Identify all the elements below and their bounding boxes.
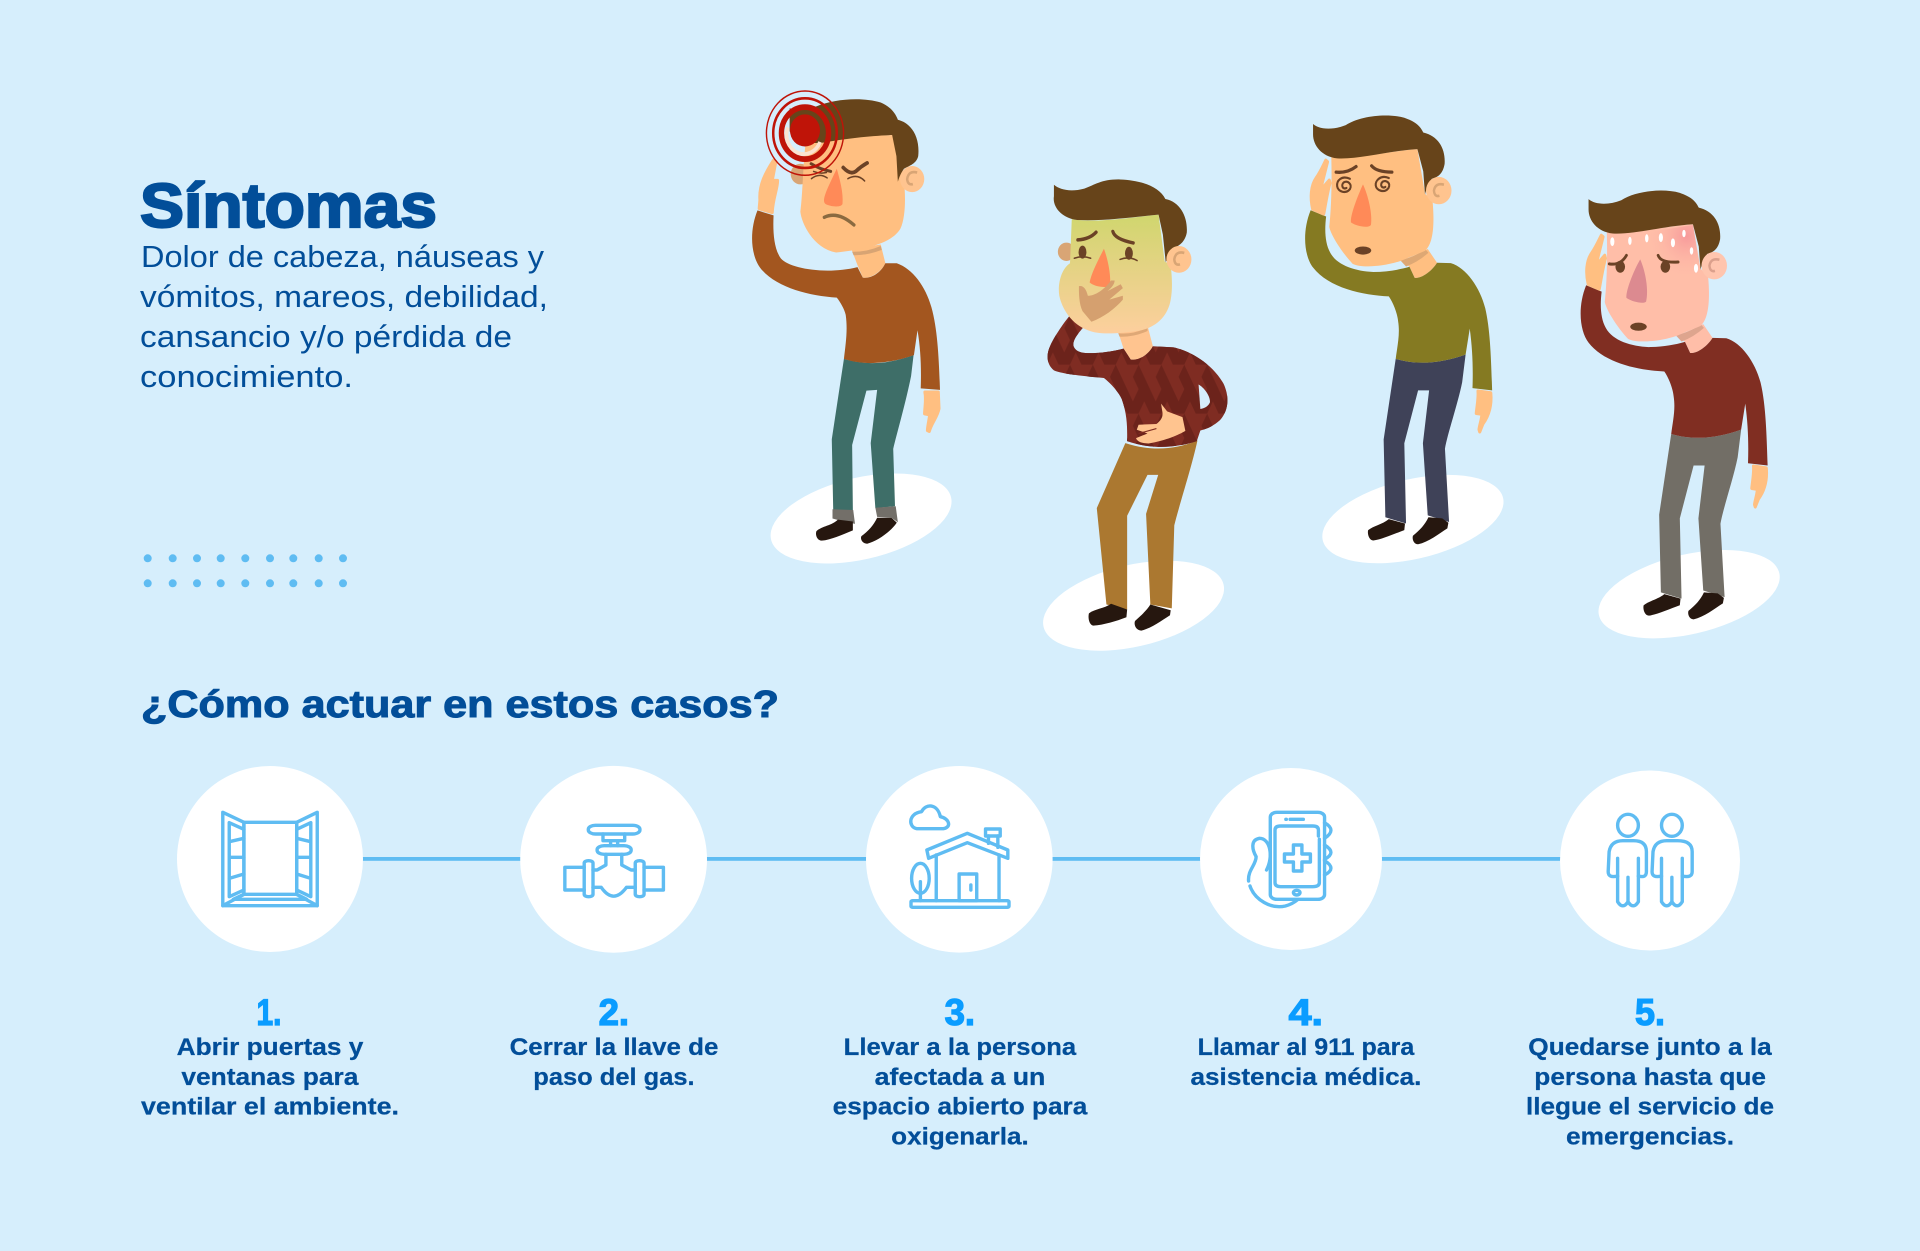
step 3 text: afectada a un xyxy=(875,1064,1045,1091)
step 5 text: persona hasta que xyxy=(1534,1064,1766,1091)
symptoms text block xyxy=(140,239,548,394)
sweater pattern xyxy=(1048,309,1227,447)
symptoms text block: Dolor de cabeza, náuseas y xyxy=(141,239,545,274)
connector line xyxy=(362,857,1562,861)
sweat drops xyxy=(1610,230,1698,273)
step 3 text: espacio abierto para xyxy=(833,1094,1088,1120)
pain target xyxy=(766,91,844,175)
step 2 circle with valve icon xyxy=(520,766,707,953)
step 1 text: 1. xyxy=(256,992,282,1033)
step 1 text xyxy=(141,992,399,1120)
step 3 text: 3. xyxy=(945,992,975,1033)
step 1 text: ventanas para xyxy=(181,1064,359,1091)
step 4 text: asistencia médica. xyxy=(1190,1064,1421,1091)
step 2 text: Cerrar la llave de xyxy=(510,1034,718,1061)
step 5 text: llegue el servicio de xyxy=(1526,1094,1774,1120)
step 5 text: Quedarse junto a la xyxy=(1528,1034,1772,1061)
step 3 text xyxy=(833,992,1088,1150)
title: Síntomas xyxy=(140,172,437,241)
step 4 text: Llamar al 911 para xyxy=(1198,1034,1415,1061)
figure: headache xyxy=(752,91,959,579)
step 3 text: oxigenarla. xyxy=(891,1124,1029,1150)
step 5 text: 5. xyxy=(1635,992,1665,1033)
step 3 circle with house icon xyxy=(866,766,1053,953)
step 5 text: emergencias. xyxy=(1566,1124,1734,1150)
step 2 text xyxy=(510,992,718,1091)
step 1 text: ventilar el ambiente. xyxy=(141,1094,399,1120)
step 1 circle with window icon xyxy=(177,766,363,952)
step 4 text xyxy=(1190,992,1421,1091)
step 5 text xyxy=(1526,992,1774,1150)
figure: nausea xyxy=(1035,179,1232,666)
symptoms text block: vómitos, mareos, debilidad, xyxy=(140,279,548,314)
step 5 circle with people icon xyxy=(1560,770,1740,950)
step 4 circle with phone icon xyxy=(1200,768,1382,950)
step 4 text: 4. xyxy=(1289,992,1323,1033)
symptoms text block: conocimiento. xyxy=(140,359,353,394)
dot grid xyxy=(144,554,347,587)
step 1 text: Abrir puertas y xyxy=(177,1034,364,1061)
heading: ¿Cómo actuar en estos casos? xyxy=(141,684,779,726)
figure: dizziness xyxy=(1305,115,1511,579)
step 2 text: 2. xyxy=(599,992,629,1033)
figure: weakness and sweating xyxy=(1581,191,1787,654)
step 2 text: paso del gas. xyxy=(533,1064,695,1091)
symptoms text block: cansancio y/o pérdida de xyxy=(140,319,512,354)
step 3 text: Llevar a la persona xyxy=(844,1034,1077,1061)
